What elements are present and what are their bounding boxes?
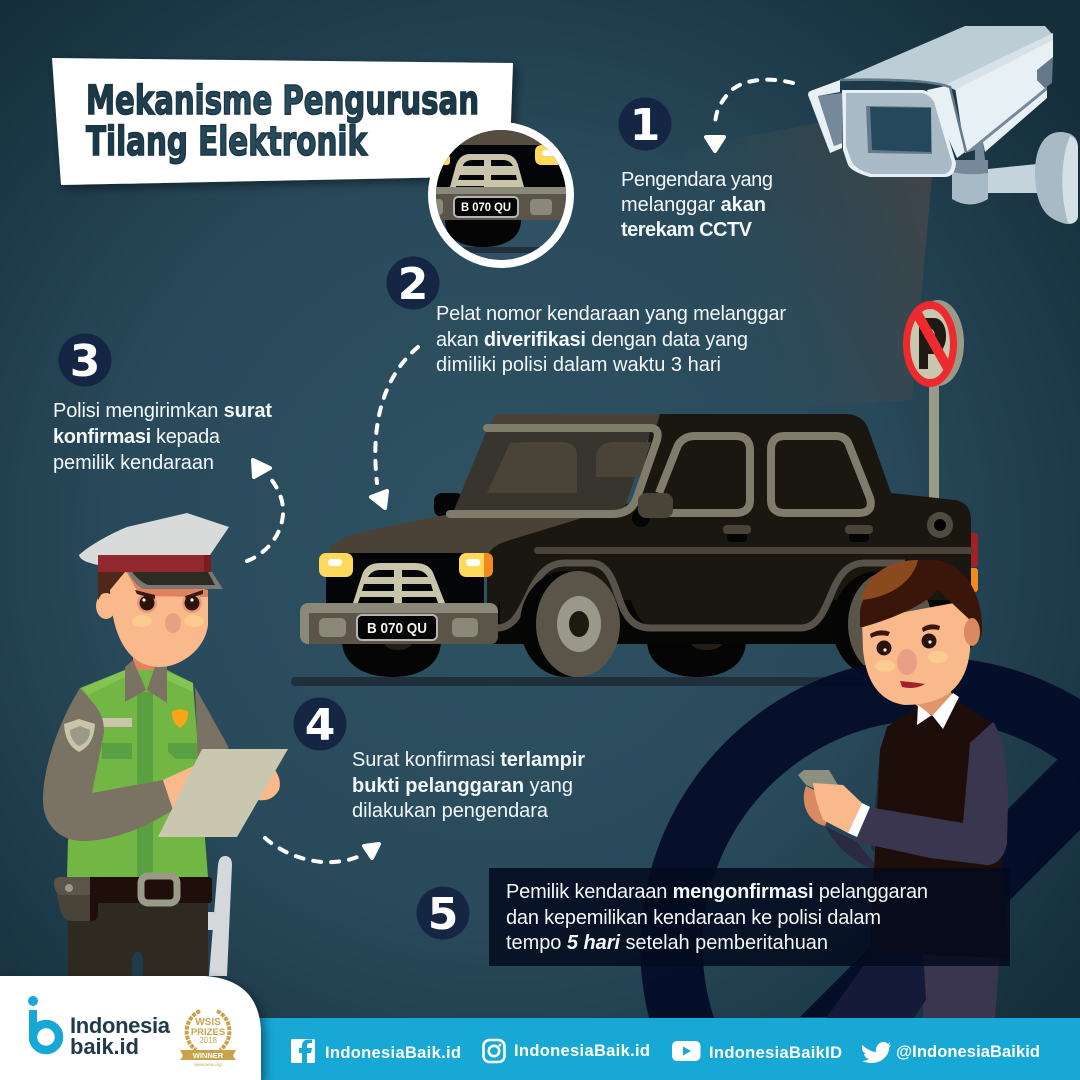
icon: youtube	[672, 1041, 700, 1061]
WSIS award badge	[180, 1011, 236, 1067]
step 4 text: bukti pelanggaran yang	[352, 775, 573, 797]
logo text: baik.id	[70, 1034, 139, 1059]
step 3 text	[53, 400, 272, 474]
step 2 badge: 2	[398, 259, 428, 310]
no parking sign	[903, 300, 964, 500]
step 3 text: konfirmasi kepada	[53, 426, 221, 448]
title panel	[52, 58, 513, 185]
icon: twitter	[862, 1042, 891, 1063]
step 5 text: Pemilik kendaraan mengonfirmasi pelanggaran	[506, 881, 928, 903]
title text: Mekanisme Pengurusan	[86, 78, 479, 124]
far sleeve	[825, 750, 890, 868]
car body	[487, 414, 971, 644]
step 1 text: melanggar akan	[621, 194, 766, 216]
step 1 text: Pengendara yang	[621, 169, 773, 191]
instagram handle: IndonesiaBaik.id	[514, 1042, 650, 1060]
footer bar	[0, 1018, 1080, 1080]
step 4 badge	[294, 698, 346, 751]
WSIS award badge: WSIS	[195, 1017, 221, 1028]
sleeve	[857, 722, 1008, 865]
body strip	[534, 547, 973, 554]
logo text	[70, 1013, 171, 1059]
step 5 dark text box	[489, 868, 1010, 966]
hands and paper	[158, 749, 288, 837]
license plate	[357, 615, 437, 640]
step 3 text: pemilik kendaraan	[53, 452, 214, 474]
arrow step 1	[706, 80, 793, 151]
step 2 text: akan diverifikasi dengan data yang	[436, 329, 748, 351]
license plate: B 070 QU	[367, 620, 427, 637]
step 2 text: Pelat nomor kendaraan yang melanggar	[436, 303, 786, 325]
youtube handle: IndonesiaBaikID	[709, 1044, 842, 1062]
neck	[905, 690, 955, 716]
title text	[86, 78, 479, 165]
housing under strip	[983, 90, 1047, 152]
legs	[923, 950, 1000, 1018]
step 2 text: dimiliki polisi dalam waktu 3 hari	[436, 354, 721, 376]
green vest	[67, 670, 208, 877]
rear wheel	[832, 571, 932, 677]
front slanted face	[927, 85, 965, 158]
hood	[808, 80, 842, 153]
hood	[330, 515, 592, 560]
title text: Tilang Elektronik	[86, 119, 368, 165]
step 5 badge: 5	[428, 889, 458, 940]
front wheel	[520, 571, 620, 677]
car front	[300, 553, 498, 644]
step 3 text: Polisi mengirimkan surat	[53, 400, 272, 422]
step 2 text	[436, 303, 786, 376]
step 4 text: dilakukan pengendara	[352, 800, 549, 822]
badge	[172, 709, 188, 728]
side mirror behind	[434, 493, 464, 517]
vest	[870, 700, 1010, 958]
lens body	[842, 90, 956, 177]
facebook handle: IndonesiaBaik.id	[325, 1044, 461, 1062]
arrow step 3	[247, 460, 283, 561]
mirror	[632, 509, 650, 527]
belt	[87, 876, 212, 903]
police officer	[43, 513, 288, 976]
WSIS award badge: www.wsis.org	[194, 1062, 222, 1067]
icon: instagram	[484, 1040, 504, 1062]
step 5 text: tempo 5 hari setelah pemberitahuan	[506, 932, 828, 954]
head	[860, 560, 982, 705]
fuel cap	[927, 512, 953, 538]
hand and phone	[798, 770, 870, 837]
housing side	[955, 38, 1053, 153]
collar	[917, 693, 959, 729]
logo panel	[0, 976, 261, 1080]
logo mark	[28, 996, 59, 1050]
collar	[125, 660, 146, 702]
far arm	[195, 687, 229, 762]
neck	[133, 655, 167, 691]
WSIS award badge: PRIZES	[191, 1027, 225, 1038]
step 4 badge: 4	[305, 700, 335, 751]
step 1 badge	[618, 98, 672, 151]
step 5 text	[506, 881, 928, 954]
door handles	[727, 532, 747, 542]
car	[291, 414, 978, 686]
arrow step 4	[265, 838, 379, 862]
step 4 text: Surat konfirmasi terlampir	[352, 749, 585, 771]
WSIS award badge: WINNER	[193, 1051, 224, 1060]
belt pouch	[54, 877, 98, 921]
license plate zoom circle: B 070 QU	[461, 200, 511, 214]
housing top	[840, 26, 1053, 87]
camera light beam	[600, 123, 932, 420]
big dark no-entry ring behind man	[640, 657, 1080, 1018]
trousers	[68, 903, 208, 976]
wall mount	[952, 132, 1078, 224]
man with phone	[798, 560, 1010, 1018]
step 5 badge	[416, 886, 470, 940]
step 3 badge: 3	[70, 336, 100, 387]
baton	[207, 856, 232, 976]
logo text: Indonesia	[70, 1013, 171, 1038]
icon: facebook	[291, 1039, 315, 1063]
step 1 text	[621, 169, 773, 241]
arm and shoulder patch	[43, 688, 173, 841]
license plate zoom circle	[428, 122, 575, 270]
arrow step 2	[371, 347, 418, 508]
step 1 text: terekam CCTV	[621, 219, 753, 241]
step 1 badge: 1	[630, 100, 660, 151]
CCTV camera	[808, 26, 1078, 224]
WSIS award badge: 2018	[199, 1036, 217, 1045]
step 5 text: dan kepemilikan kendaraan ke polisi dalam	[506, 907, 881, 929]
windshield	[454, 414, 656, 510]
head and cap	[79, 513, 229, 667]
twitter handle: @IndonesiaBaikid	[896, 1043, 1040, 1061]
step 4 text	[352, 749, 585, 822]
step 3 badge	[58, 334, 112, 387]
step 2 badge	[386, 256, 440, 310]
car wheels under body	[342, 640, 441, 677]
lights at rear	[968, 533, 978, 567]
window frames	[450, 428, 658, 514]
ground line	[291, 677, 891, 686]
